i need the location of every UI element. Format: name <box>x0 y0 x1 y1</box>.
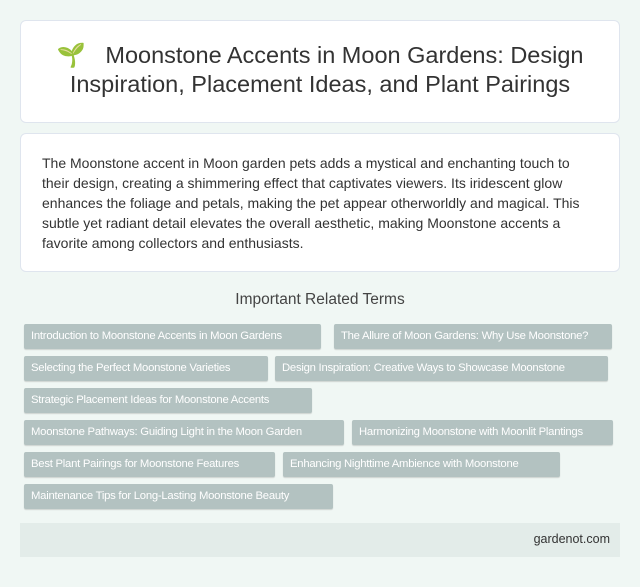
tag: Strategic Placement Ideas for Moonstone Accents <box>31 394 269 406</box>
tag: Best Plant Pairings for Moonstone Features <box>31 458 239 470</box>
tag: The Allure of Moon Gardens: Why Use Moonstone? <box>341 330 588 342</box>
tag: Selecting the Perfect Moonstone Varieties <box>31 362 230 374</box>
tag <box>24 324 321 349</box>
tag <box>275 356 608 381</box>
footer <box>20 523 620 557</box>
tag <box>24 356 268 381</box>
section heading: Important Related Terms <box>235 291 405 308</box>
tag <box>334 324 612 349</box>
description card <box>20 133 620 272</box>
tag <box>24 388 312 413</box>
tag <box>283 452 560 477</box>
description text: The Moonstone accent in Moon garden pets adds a mystical and enchanting touch to their design, creating a shimmering effect that captivates viewers. Its iridescent glow enhances the foliage and petals, making the pet appear otherworldly and magical. This subtle yet radiant detail elevates the overall aesthetic, making Moonstone accents a favorite among collectors and enthusiasts. <box>42 155 580 251</box>
tag: Harmonizing Moonstone with Moonlit Plantings <box>359 426 583 438</box>
tag: Maintenance Tips for Long-Lasting Moonstone Beauty <box>31 490 289 502</box>
tag <box>352 420 613 445</box>
tag <box>24 452 275 477</box>
tag: Introduction to Moonstone Accents in Moon Gardens <box>31 330 282 342</box>
tag <box>24 420 344 445</box>
tag: Enhancing Nighttime Ambience with Moonstone <box>290 458 519 470</box>
title: 🌱 Moonstone Accents in Moon Gardens: Design Inspiration, Placement Ideas, and Plant Pairings <box>57 42 583 97</box>
tag: Design Inspiration: Creative Ways to Showcase Moonstone <box>282 362 565 374</box>
tag: Moonstone Pathways: Guiding Light in the Moon Garden <box>31 426 302 438</box>
footer source: gardenot.com <box>534 532 610 546</box>
title card <box>20 20 620 123</box>
tag <box>24 484 333 509</box>
